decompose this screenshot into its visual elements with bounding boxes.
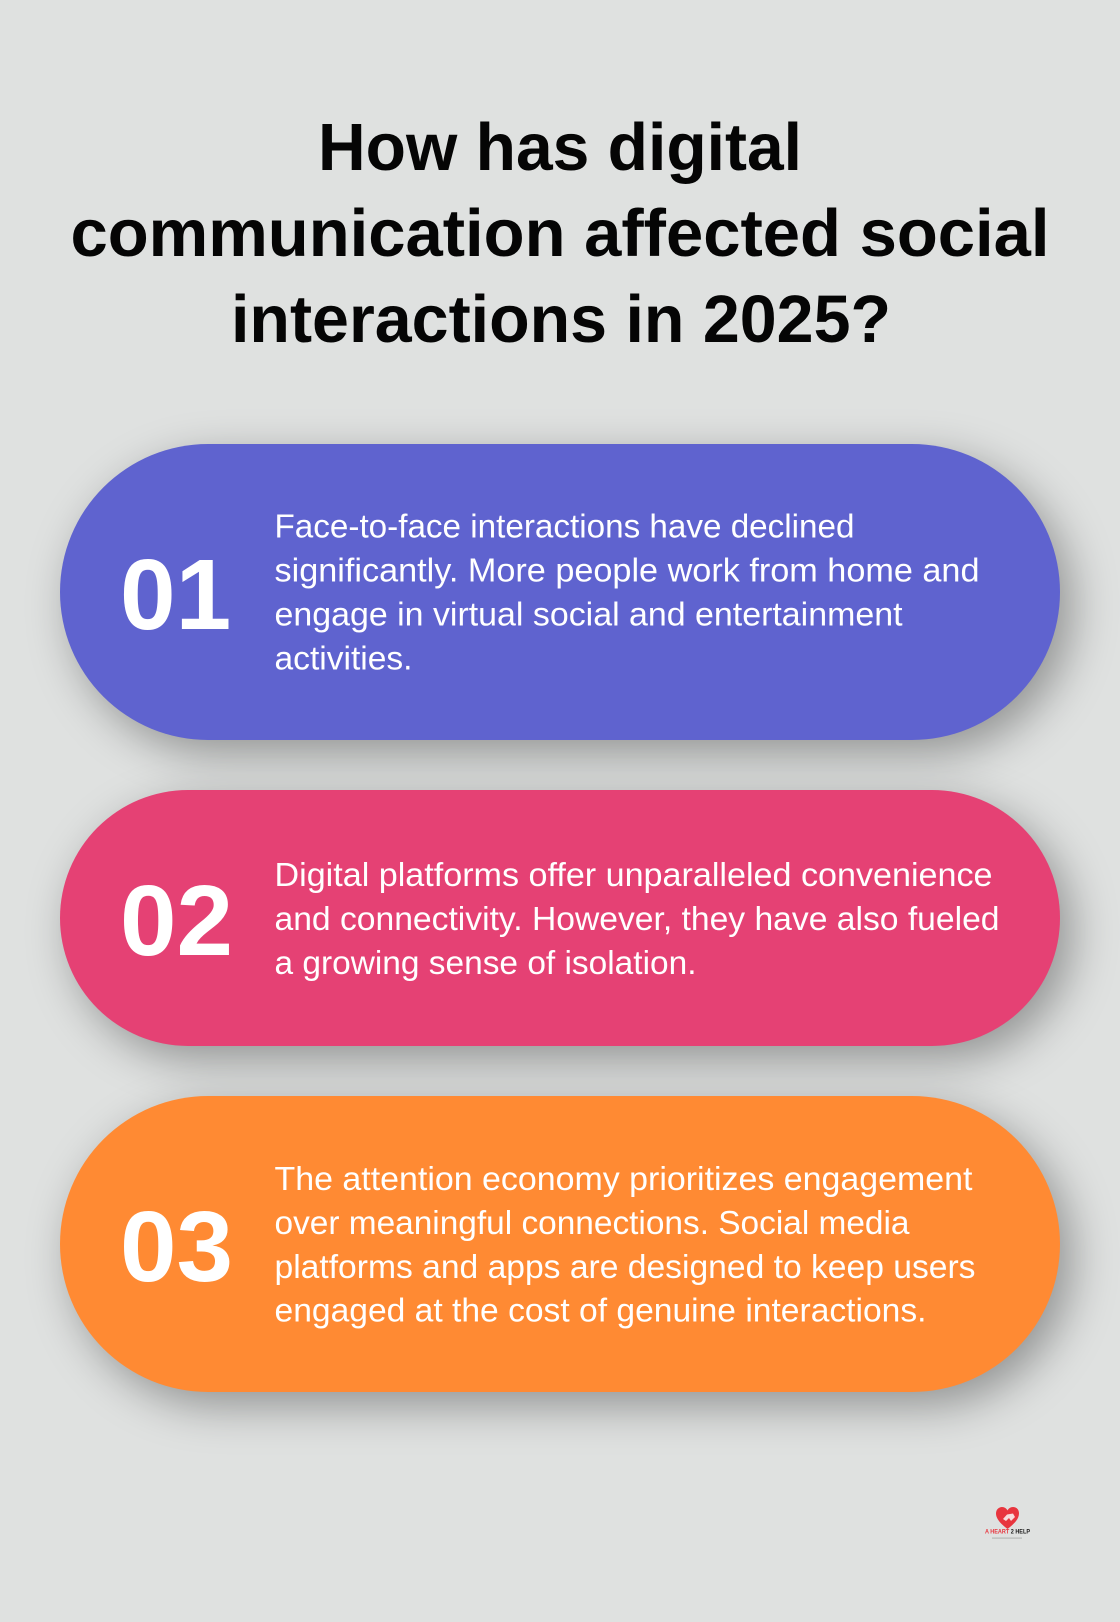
icon: hand in heart: [1003, 1514, 1015, 1521]
text block: card 01: Face-to-face interactions have declined: [274, 508, 854, 544]
logo wordmark: A HEART 2 HELP: [985, 1528, 1030, 1536]
text block: card 03: over meaningful connections. Social media: [274, 1204, 910, 1241]
icon: heart: [996, 1507, 1019, 1529]
text block: card 02: a growing sense of isolation.: [274, 944, 696, 981]
text block: card 03: engaged at the cost of genuine interactions.: [274, 1292, 926, 1328]
logo: A Heart 2 Help: [985, 1507, 1030, 1539]
text block: card 03: platforms and apps are designed to keep users: [274, 1248, 976, 1285]
title: [70, 110, 1050, 357]
text block: card 02: Digital platforms offer unparalleled convenience: [274, 856, 992, 893]
panel: card 03: [60, 1096, 1060, 1392]
panel: card 02: [60, 790, 1060, 1046]
text block: card 03: [274, 1160, 976, 1328]
number 02: 02: [120, 865, 233, 977]
text block: card 01: engage in virtual social and entertainment: [274, 596, 902, 632]
panel: card 01: [60, 444, 1060, 740]
title: interactions in 2025?: [231, 282, 891, 357]
text block: card 02: [274, 856, 1000, 981]
number 01: 01: [120, 539, 231, 651]
text block: card 01: significantly. More people work from home and: [274, 552, 980, 588]
text block: card 02: and connectivity. However, they have also fueled: [274, 900, 1000, 937]
title: How has digital: [318, 110, 802, 185]
title: communication affected social: [70, 196, 1050, 271]
text block: card 01: activities.: [274, 640, 412, 676]
text block: card 01: [274, 508, 980, 676]
text block: card 03: The attention economy prioritizes engagement: [274, 1160, 973, 1197]
number 03: 03: [120, 1191, 233, 1303]
